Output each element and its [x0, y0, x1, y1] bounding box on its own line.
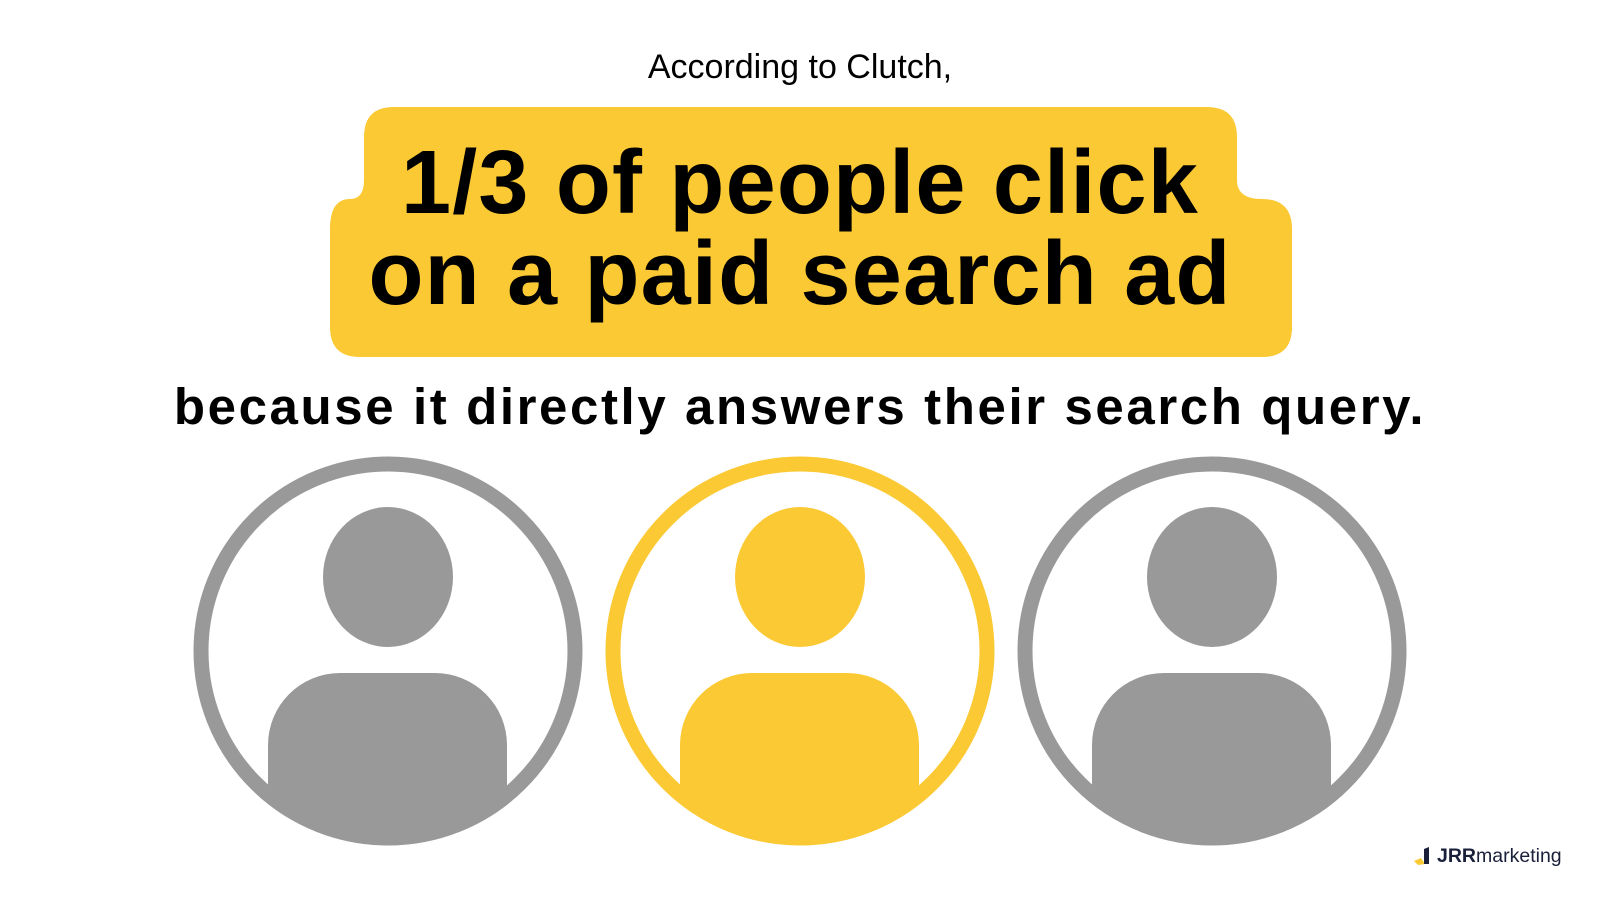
logo: JRRmarketing [1437, 845, 1562, 867]
people icons [194, 456, 1406, 846]
subtitle: because it directly answers their search query. [174, 378, 1426, 435]
headline: 1/3 of people click [401, 133, 1199, 233]
icon: person gray right [1025, 464, 1399, 893]
headline: on a paid search ad [368, 224, 1232, 324]
intro text: According to Clutch, [648, 48, 952, 86]
icon: person gray left [201, 464, 575, 893]
icon: person yellow center [613, 464, 987, 893]
headline [368, 133, 1232, 324]
